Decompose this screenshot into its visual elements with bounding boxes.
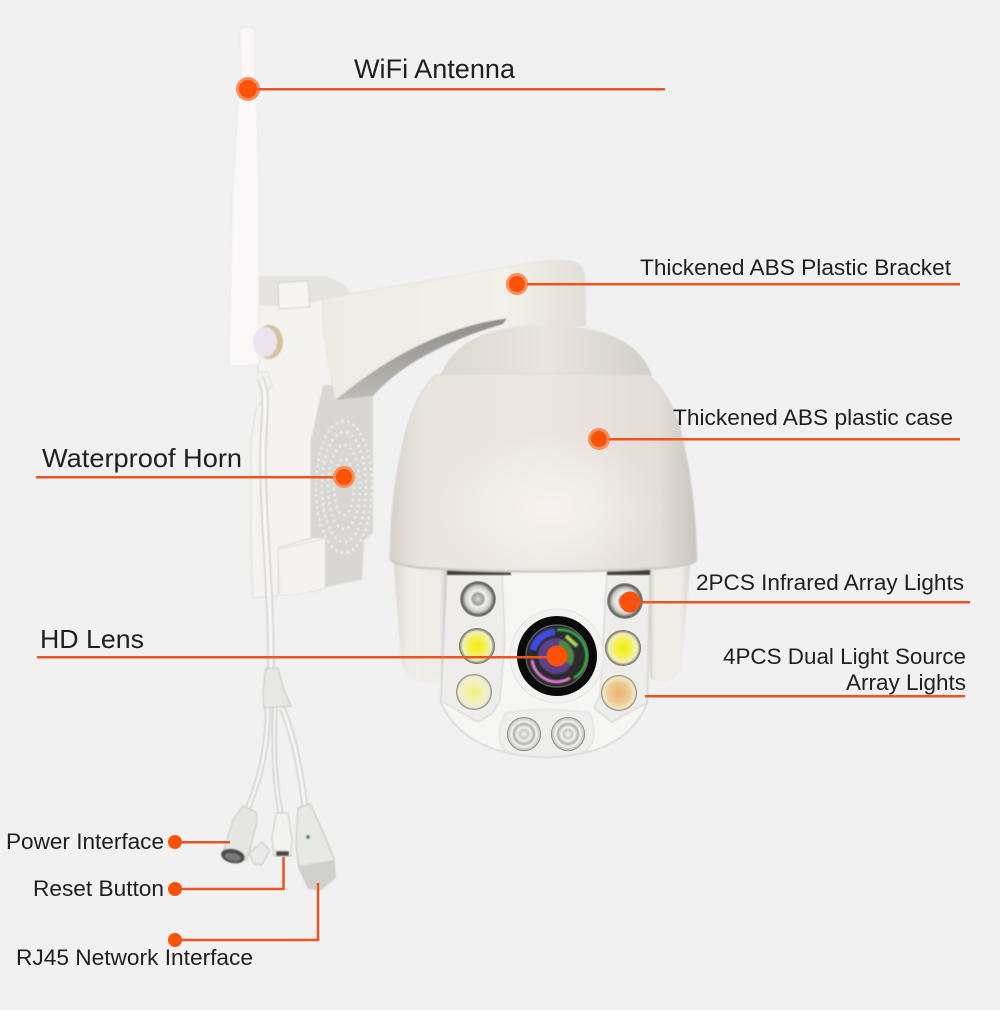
icon: right flap xyxy=(648,555,691,682)
callout: Waterproof Horn: Waterproof Horn xyxy=(42,443,242,473)
callout: WiFi Antenna xyxy=(238,54,665,100)
icon: bracket arm shadow xyxy=(335,318,507,400)
callout: Power Interface xyxy=(6,829,230,854)
icon: dual light left upper xyxy=(459,628,495,664)
callout: Thickened ABS Plastic Bracket: Thickened ABS Plastic Bracket xyxy=(640,255,951,280)
icon: reset button connector xyxy=(249,813,292,865)
callout: Reset Button: Reset Button xyxy=(33,876,164,901)
icon: bottom lamp left xyxy=(507,717,541,751)
icon: camera lens xyxy=(510,609,604,703)
callout: 2PCS Infrared Array Lights xyxy=(620,570,970,612)
icon: wall mount plate xyxy=(251,277,373,598)
callout: HD Lens: HD Lens xyxy=(40,624,144,654)
callout: 4PCS Dual Light Source Array Lights xyxy=(645,644,966,698)
icon: dome shroud xyxy=(390,374,697,572)
icon: left flap xyxy=(393,555,448,683)
callout: Thickened ABS plastic case xyxy=(590,405,960,448)
icon: dual light left lower xyxy=(456,674,492,710)
callout: Thickened ABS Plastic Bracket xyxy=(508,255,960,294)
icon: RJ45 connector xyxy=(296,804,335,890)
callout: Waterproof Horn xyxy=(36,443,354,486)
icon: infrared light left xyxy=(460,581,496,617)
callout: 4PCS Dual Light Source Array Lights: 4PCS Dual Light Source xyxy=(723,644,966,669)
icon: network and power cable xyxy=(248,378,305,815)
icon: camera face housing xyxy=(441,568,650,757)
icon: PIR sensor xyxy=(253,325,283,359)
icon: dual light right lower xyxy=(601,675,637,711)
icon: WiFi antenna xyxy=(229,27,259,366)
icon: speaker holes xyxy=(316,421,372,553)
callout: WiFi Antenna: WiFi Antenna xyxy=(354,54,516,84)
callout: Power Interface: Power Interface xyxy=(6,829,164,854)
icon: power connector xyxy=(220,806,257,865)
callout: Thickened ABS plastic case: Thickened ABS plastic case xyxy=(673,405,953,430)
icon: infrared light right xyxy=(607,583,643,619)
callout: HD Lens xyxy=(37,624,568,666)
icon: dual light right upper xyxy=(605,630,641,666)
callout: RJ45 Network Interface: RJ45 Network Interface xyxy=(16,945,253,970)
callout: Reset Button xyxy=(33,857,284,901)
icon: dome top xyxy=(440,325,652,376)
icon: bracket arm xyxy=(322,260,586,400)
callout: 2PCS Infrared Array Lights: 2PCS Infrared Array Lights xyxy=(696,570,964,595)
callout: 4PCS Dual Light Source Array Lights: Array Lights xyxy=(846,670,966,695)
callout: RJ45 Network Interface xyxy=(16,883,318,970)
icon: bottom lamp right xyxy=(551,717,585,751)
